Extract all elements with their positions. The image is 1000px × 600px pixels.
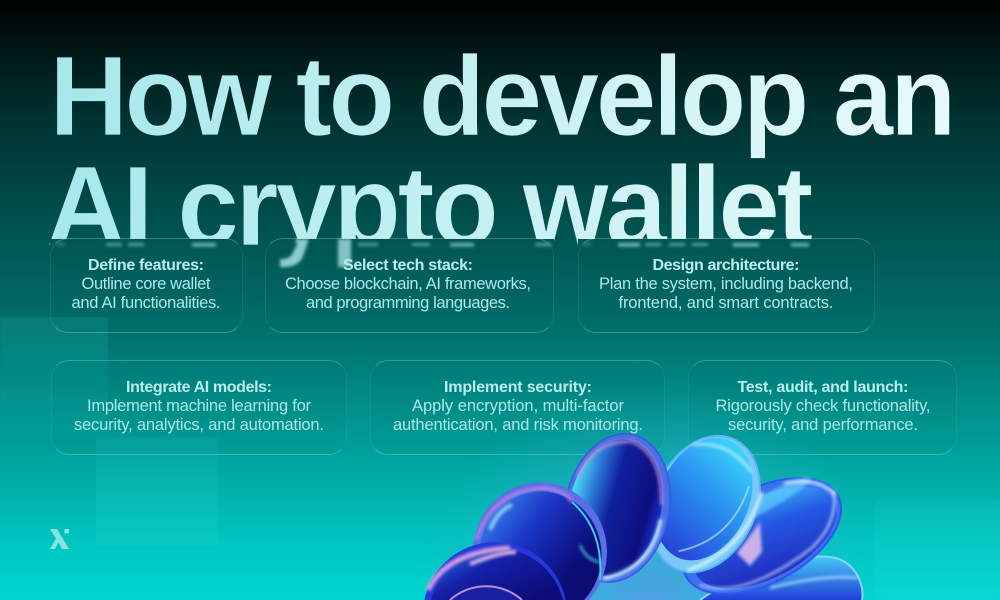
- card: test, audit, and launch: Rigorously check functionality,: [716, 397, 930, 415]
- card: select tech stack: Choose blockchain, AI frameworks,: [285, 275, 531, 293]
- card: test, audit, and launch: Test, audit, and launch:: [738, 379, 908, 396]
- card: select tech stack: [265, 238, 554, 333]
- coin: lower left: [424, 542, 566, 600]
- title: How to develop an: [50, 33, 953, 159]
- card: design architecture: Plan the system, including backend,: [599, 275, 853, 293]
- card: test, audit, and launch: [688, 360, 957, 455]
- card: design architecture: frontend, and smart contracts.: [618, 294, 834, 312]
- card: implement security: [370, 360, 665, 455]
- card: define features: Outline core wallet: [82, 275, 211, 293]
- card: integrate AI models: security, analytics, and automation.: [74, 416, 324, 434]
- blurred title remnants behind cards: [57, 243, 809, 246]
- card: select tech stack: and programming languages.: [306, 294, 510, 312]
- card: implement security: Implement security:: [444, 379, 592, 396]
- coin: bottom right: [700, 556, 863, 600]
- coin: inner small: [450, 586, 522, 600]
- card: integrate AI models: Integrate AI models:: [126, 379, 272, 396]
- card: design architecture: Design architecture:: [652, 257, 800, 274]
- card: implement security: authentication, and risk monitoring.: [393, 416, 643, 434]
- blurred descenders: [280, 239, 351, 267]
- card: define features: and AI functionalities.: [72, 294, 220, 312]
- coin: right: [664, 454, 860, 600]
- card: implement security: Apply encryption, multi-factor: [412, 397, 624, 415]
- icon: logo mark: [50, 529, 69, 549]
- card: select tech stack: Select tech stack:: [343, 257, 473, 274]
- coin: light blue: [630, 418, 780, 590]
- card: integrate AI models: Implement machine learning for: [87, 397, 312, 415]
- card: design architecture: [578, 238, 875, 333]
- card: define features: [50, 238, 243, 333]
- title: [49, 53, 950, 270]
- title: AI crypto wallet: [46, 143, 813, 269]
- card: test, audit, and launch: security, and performance.: [728, 416, 918, 434]
- coin: top center dark: [551, 424, 683, 592]
- highlight: lilac reflection on right coin: [737, 522, 762, 566]
- card: define features: Define features:: [88, 257, 204, 274]
- card: integrate AI models: [51, 360, 347, 455]
- coin: left: [473, 482, 607, 600]
